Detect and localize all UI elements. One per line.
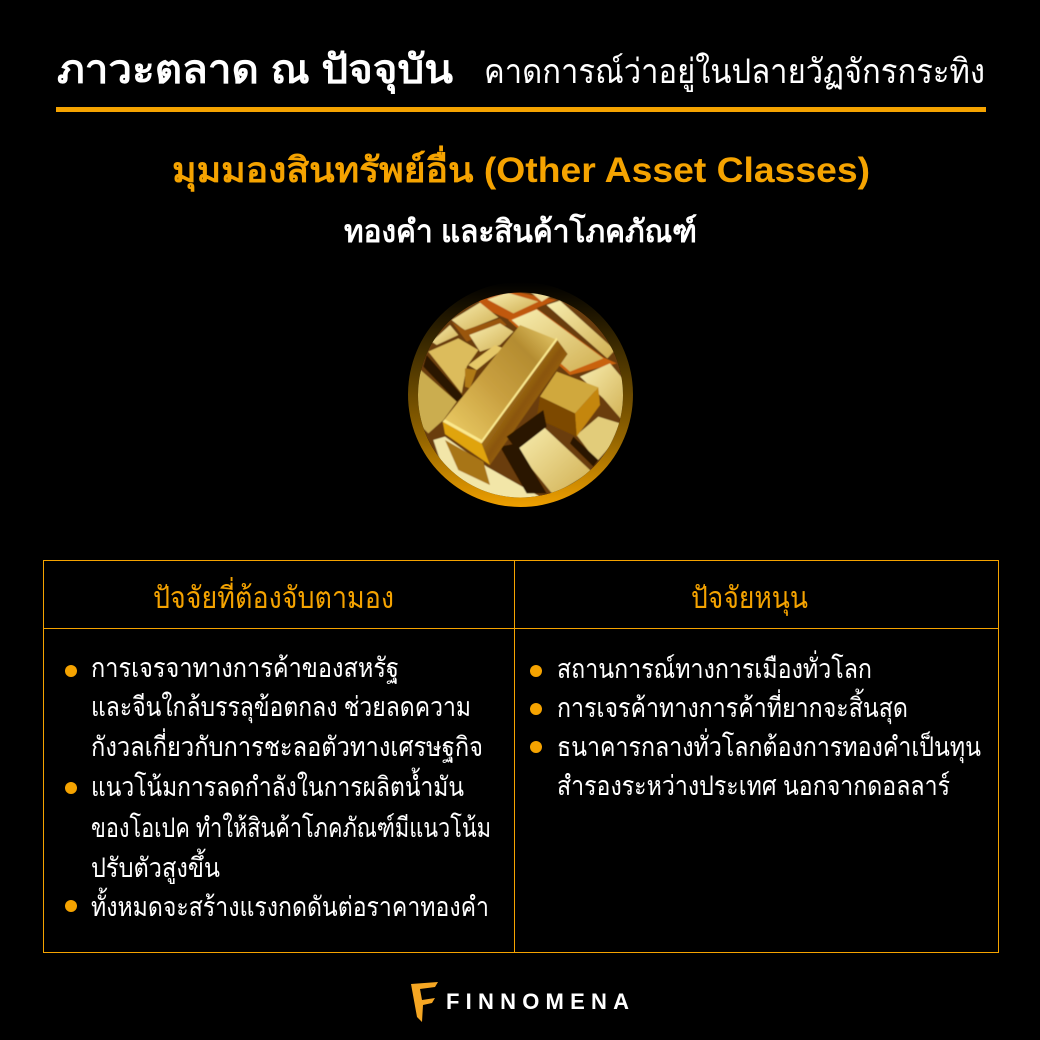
right column: bullet list: การเจรค้าทางการค้าที่ยากจะสิ้นสุด (557, 688, 908, 725)
sub-heading: gold and commodities: ทองคำ และสินค้าโภคภัณฑ์ (344, 213, 697, 249)
logo: FINNOMENA (411, 982, 629, 1022)
left column: bullet list: และจีนใกล้บรรลุข้อตกลง ช่วยลดความ (91, 691, 471, 724)
left column: bullet list: กังวลเกี่ยวกับการชะลอตัวทางเศรษฐกิจ (91, 728, 483, 763)
left column: bullet list: ทั้งหมดจะสร้างแรงกดดันต่อราคาทองคำ (91, 887, 489, 922)
right column: bullet list (530, 650, 981, 801)
right column: bullet list: สำรองระหว่างประเทศ นอกจากดอลลาร์ (557, 770, 950, 801)
title underline (56, 107, 986, 112)
title: ภาวะตลาด ณ ปัจจุบัน (57, 48, 453, 95)
table: factors (43, 560, 998, 952)
right column: bullet list: ธนาคารกลางทั่วโลกต้องการทองคำเป็นทุน (557, 728, 981, 764)
left column: bullet list (65, 653, 491, 922)
heading: other asset classes: มุมมองสินทรัพย์อื่น (Other Asset Classes) (172, 145, 870, 192)
icon: F mark (411, 982, 438, 1022)
icon: circular gold bars image (408, 282, 633, 507)
left column: bullet list: ของโอเปค ทำให้สินค้าโภคภัณฑ์มีแนวโน้ม (91, 812, 491, 843)
right column: bullet list: สถานการณ์ทางการเมืองทั่วโลก (557, 650, 872, 684)
column header: supporting factors: ปัจจัยหนุน (691, 582, 808, 617)
logo: FINNOMENA: FINNOMENA (446, 989, 629, 1014)
column header: factors to watch: ปัจจัยที่ต้องจับตามอง (153, 577, 394, 615)
left column: bullet list: ปรับตัวสูงขึ้น (91, 848, 220, 884)
subtitle: market phase: คาดการณ์ว่าอยู่ในปลายวัฏจักรกระทิง (484, 52, 985, 92)
left column: bullet list: แนวโน้มการลดกำลังในการผลิตน้ำมัน (91, 767, 464, 802)
left column: bullet list: การเจรจาทางการค้าของสหรัฐ (91, 653, 399, 684)
